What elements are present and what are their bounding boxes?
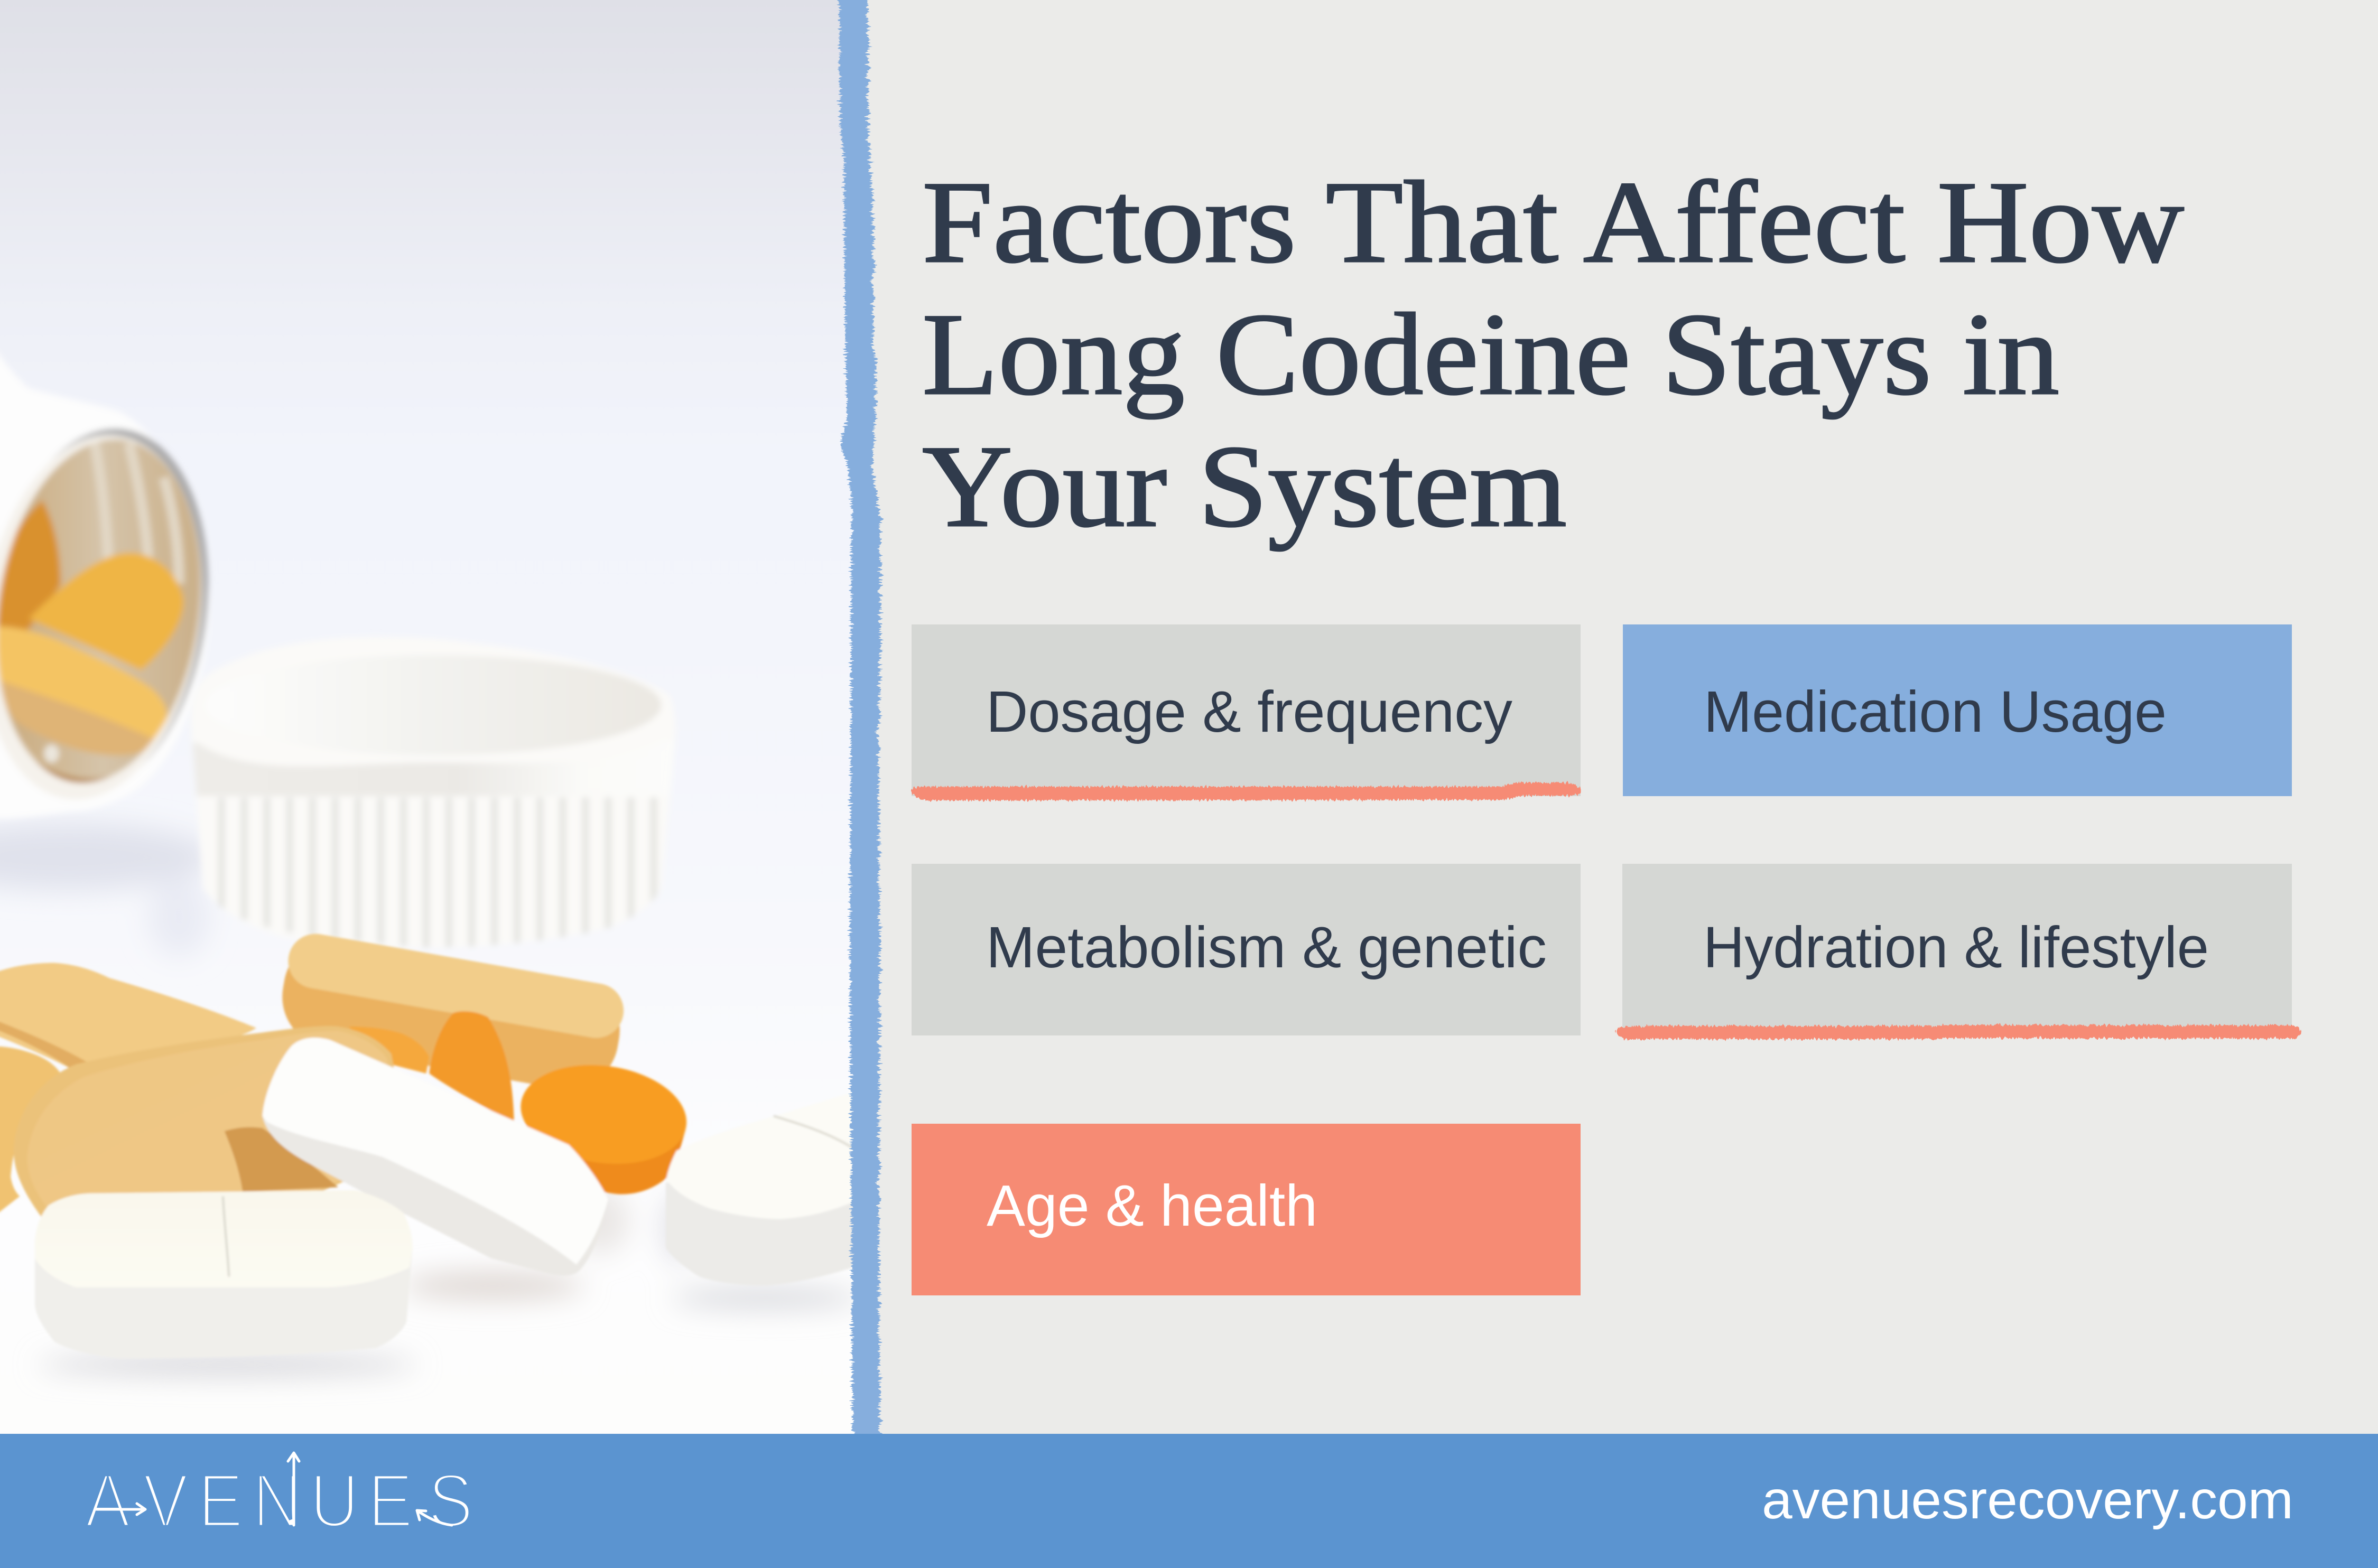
logo: Avenues wordmark with arrows: E — [368, 1458, 413, 1543]
footer band — [0, 1434, 2378, 1568]
website url: avenuesrecovery.com — [1762, 1470, 2293, 1530]
logo: Avenues wordmark with arrows: U — [310, 1458, 359, 1543]
heading: Long Codeine Stays in — [922, 290, 2059, 419]
logo: Avenues wordmark with arrows — [85, 1453, 473, 1543]
logo: Avenues wordmark with arrows: A — [85, 1458, 131, 1543]
bottle cap — [190, 637, 680, 955]
logo: Avenues wordmark with arrows: V — [143, 1458, 188, 1543]
bottom white tablet — [35, 1190, 413, 1359]
heading: Factors That Affect How — [922, 157, 2184, 287]
card: hydration and lifestyle — [1616, 864, 2301, 1039]
logo: Avenues wordmark with arrows: E — [198, 1458, 243, 1543]
card: hydration and lifestyle: Hydration & lifestyle — [1703, 915, 2209, 980]
medicine bottle — [0, 358, 212, 817]
heading — [922, 157, 2184, 552]
logo: Avenues wordmark with arrows: N — [253, 1458, 301, 1543]
small orange tablet — [349, 1026, 429, 1074]
torn blue divider strip — [839, 0, 880, 1442]
card: medication usage: Medication Usage — [1704, 679, 2167, 744]
tablets pile — [0, 929, 880, 1359]
card: age and health: Age & health — [987, 1173, 1317, 1238]
top long tablet — [281, 932, 625, 1085]
card: metabolism and genetic — [912, 864, 1581, 1035]
right white tablet — [666, 1084, 880, 1286]
large yellow tablet — [14, 1026, 410, 1220]
logo: Avenues wordmark with arrows: S — [428, 1458, 473, 1543]
card: metabolism and genetic: Metabolism & genetic — [986, 915, 1547, 980]
card: dosage and frequency: Dosage & frequency — [986, 679, 1512, 744]
card: dosage and frequency — [911, 624, 1581, 800]
heading: Your System — [922, 422, 1567, 552]
tilted white tablet — [261, 1116, 593, 1275]
left small tablet — [0, 1046, 61, 1218]
left upper tablet — [0, 963, 256, 1069]
round orange tablet — [581, 1131, 686, 1196]
card: medication usage — [1623, 624, 2292, 796]
card: age and health — [912, 1124, 1581, 1295]
photo: spilled pills and bottle — [0, 0, 880, 1434]
wedge orange tablet — [429, 1011, 514, 1124]
